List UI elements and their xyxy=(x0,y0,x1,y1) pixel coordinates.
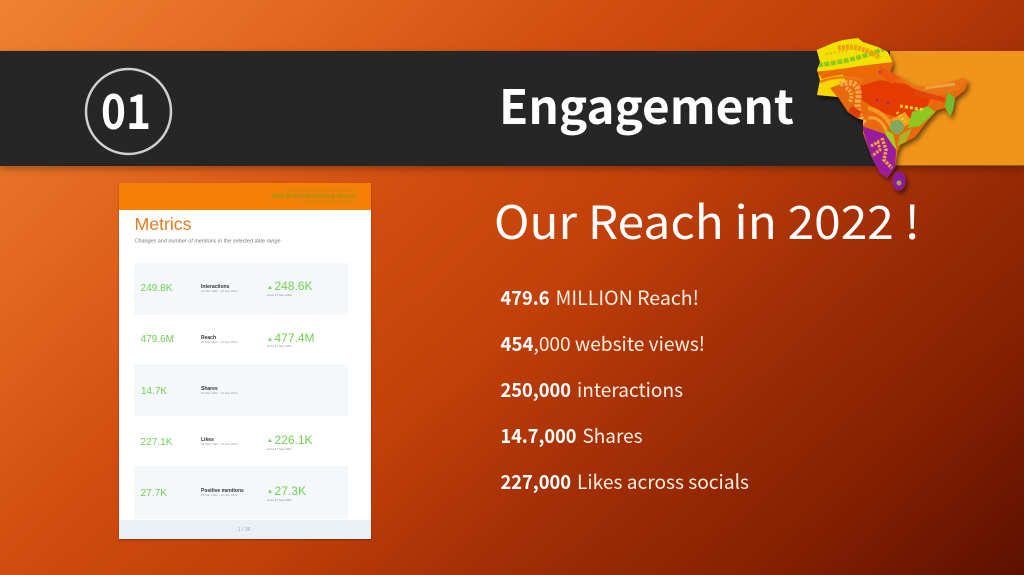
stat: website views: ,000 website views! xyxy=(534,328,705,357)
stat: likes xyxy=(500,466,749,495)
row: interactions xyxy=(134,263,348,315)
row: shares xyxy=(134,364,348,416)
row: positive mentions xyxy=(134,466,348,519)
row: likes: 226.1K xyxy=(274,433,313,447)
stat: shares: Shares xyxy=(582,420,642,449)
row: positive mentions: since 17 Sep 2021 xyxy=(267,498,292,502)
row: positive mentions: 23 Mar 2022 · 13 Sep 2022 xyxy=(201,493,238,497)
row: likes: 23 Mar 2022 · 13 Sep 2022 xyxy=(201,442,238,446)
report header band xyxy=(119,183,371,210)
row: likes: ▲ xyxy=(267,438,273,444)
stat: interactions: 250,000 xyxy=(500,374,571,403)
row: reach: since 17 Sep 2021 xyxy=(267,344,292,348)
row: positive mentions: 27.7K xyxy=(140,488,167,499)
row: positive mentions: ▲ xyxy=(267,489,273,495)
stat: likes: 227,000 xyxy=(500,466,571,495)
row: likes: 227.1K xyxy=(140,437,173,448)
report title: Metrics xyxy=(134,214,192,234)
row: shares: Shares xyxy=(201,386,218,392)
row: interactions: since 17 Sep 2021 xyxy=(267,293,292,297)
report thumbnail panel xyxy=(119,183,371,539)
row: interactions: 23 Mar 2022 · 13 Sep 2022 xyxy=(201,289,238,293)
stat: reach: MILLION Reach! xyxy=(556,282,699,311)
stat: reach: 479.6 xyxy=(500,282,550,311)
heading: Engagement: Engagement xyxy=(499,69,794,138)
row: reach xyxy=(140,331,314,348)
report footer band: 1 / 36 xyxy=(238,527,251,533)
panel page xyxy=(119,183,371,539)
stat: website views: 454 xyxy=(500,328,534,357)
stat: interactions xyxy=(500,374,683,403)
row: shares: 14.7K xyxy=(141,386,167,397)
row: interactions: 248.6K xyxy=(274,279,313,293)
subheading: Our Reach in 2022: Our Reach in 2022 ! xyxy=(494,187,920,253)
row: interactions: ▲ xyxy=(267,285,273,291)
row: likes: since 17 Sep 2021 xyxy=(267,447,292,451)
row: shares: 23 Mar 2022 · 13 Sep 2022 xyxy=(201,391,238,395)
stat: interactions: interactions xyxy=(577,374,683,403)
stat: likes: Likes across socials xyxy=(577,466,749,495)
row: reach: 479.6M xyxy=(140,334,174,345)
row: positive mentions: Positive mentions xyxy=(201,488,244,494)
row: reach: ▲ xyxy=(267,337,273,343)
stats list xyxy=(500,282,749,495)
header bar xyxy=(0,51,1024,166)
stat: shares: 14.7,000 xyxy=(500,420,576,449)
row: reach: 477.4M xyxy=(274,331,314,345)
row: likes xyxy=(140,433,313,451)
stat: shares xyxy=(500,420,642,449)
row: interactions: Interactions xyxy=(201,284,230,290)
row: reach: 23 Mar 2022 · 13 Sep 2022 xyxy=(201,340,238,344)
report subtitle: Changes and number of mentions in the selected date range xyxy=(134,238,280,244)
row: likes: Likes xyxy=(201,437,214,443)
number badge xyxy=(86,69,171,154)
number badge: 01 xyxy=(101,73,151,143)
row: reach: Reach xyxy=(201,335,216,341)
row: positive mentions: 27.3K xyxy=(274,484,307,498)
report footer band xyxy=(119,520,371,539)
report header band: 2022 Brand Monitoring Report xyxy=(271,193,357,200)
row: interactions: 249.8K xyxy=(140,283,173,294)
accent block xyxy=(890,51,1024,166)
icon: South Asia map xyxy=(810,35,975,195)
